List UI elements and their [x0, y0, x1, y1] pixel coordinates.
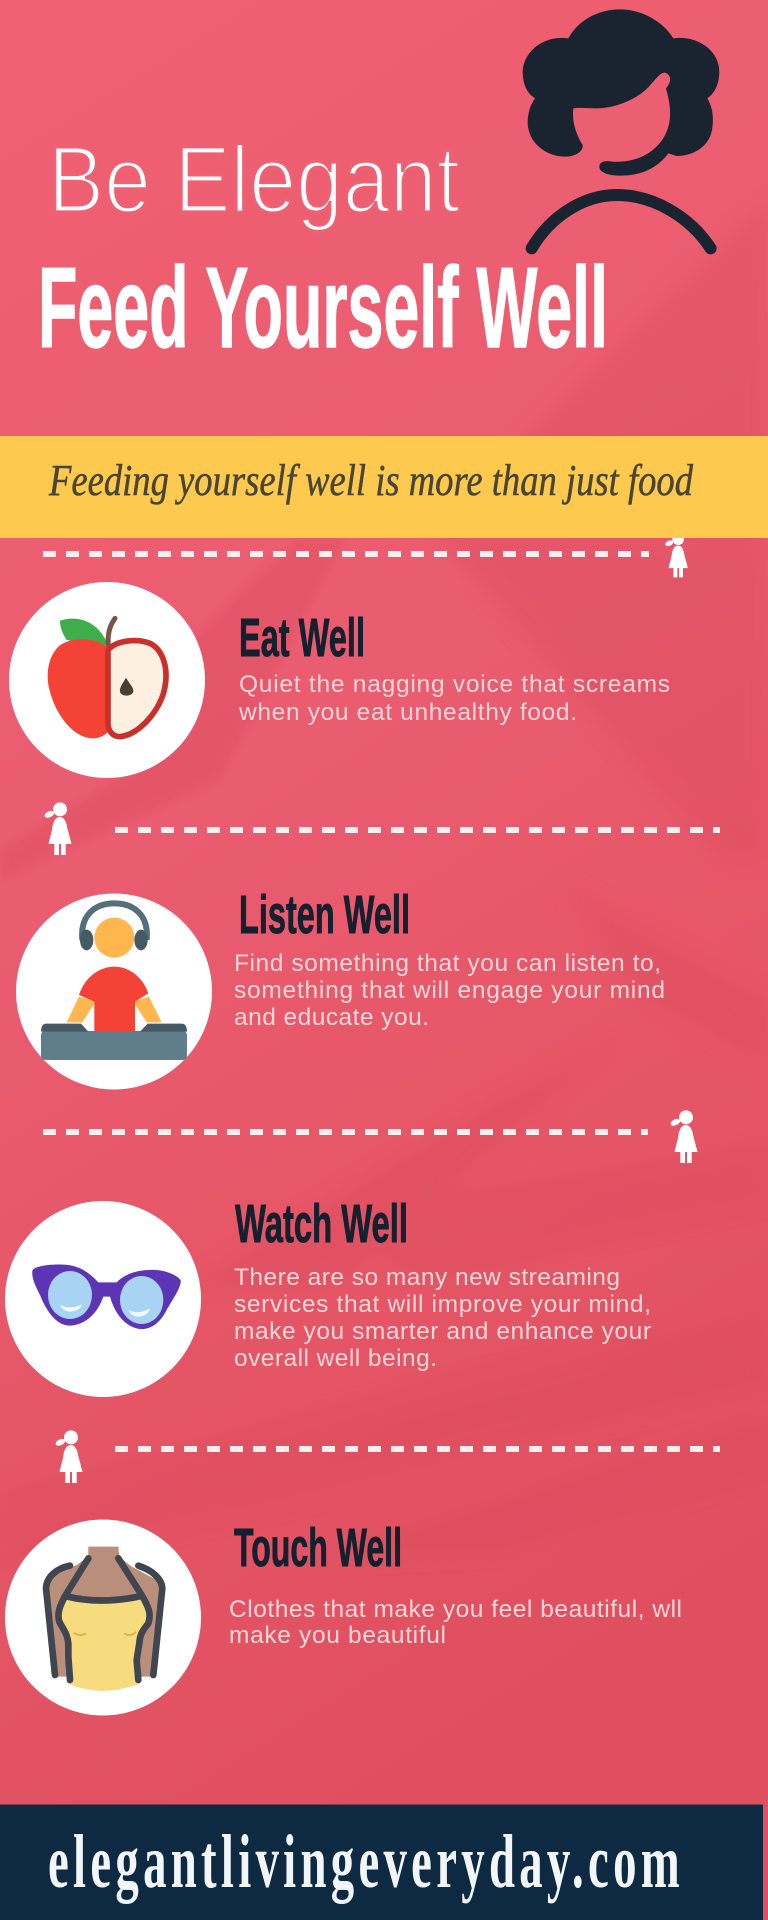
text: eat well body	[238, 671, 670, 726]
dashed divider 1	[43, 551, 649, 557]
text: watch well body	[234, 1264, 651, 1372]
panel: watch well	[5, 1194, 651, 1397]
icon: cat-eye sunglasses	[5, 1201, 201, 1397]
text: watch well body: services that will improve your mind,	[234, 1291, 651, 1318]
divider person 3	[670, 1111, 697, 1162]
icon: woman silhouette	[523, 9, 719, 248]
text: touch well body	[229, 1596, 682, 1649]
dashed divider 3	[43, 1129, 648, 1135]
text: listen well body: something that will engage your mind	[234, 977, 665, 1004]
panel: listen well	[16, 885, 665, 1090]
text: listen well body: Find something that you can listen to,	[234, 950, 661, 977]
text: eat well body: Quiet the nagging voice that screams	[239, 671, 670, 698]
icon: dj with headphones	[16, 894, 212, 1090]
divider person 4	[55, 1431, 82, 1482]
text: touch well body: Clothes that make you feel beautiful, wll	[229, 1596, 682, 1623]
text: watch well body: overall well being.	[234, 1345, 437, 1372]
divider person 1	[665, 534, 687, 577]
panel: eat well	[9, 582, 670, 778]
dashed divider 4	[115, 1446, 720, 1452]
text: listen well body: and educate you.	[234, 1004, 429, 1031]
banner	[0, 436, 768, 538]
icon: apple	[9, 582, 205, 778]
text: listen well body	[234, 950, 665, 1031]
text: watch well body: make you smarter and enhance your	[234, 1318, 651, 1345]
dashed divider 2	[115, 827, 720, 833]
heading: eat well: Eat Well	[239, 608, 365, 668]
text: eat well body: when you eat unhealthy food.	[238, 699, 577, 726]
footer bar	[0, 1804, 763, 1920]
heading: listen well: Listen Well	[239, 885, 410, 945]
divider person 2	[44, 803, 71, 854]
text: touch well body: make you beautiful	[229, 1622, 446, 1649]
panel: touch well	[5, 1518, 682, 1716]
heading: watch well: Watch Well	[235, 1194, 408, 1254]
text: watch well body: There are so many new streaming	[234, 1264, 620, 1291]
heading: touch well: Touch Well	[234, 1518, 402, 1578]
title: Be Elegant: Be Elegant	[48, 127, 460, 233]
icon: dress top	[5, 1520, 201, 1716]
